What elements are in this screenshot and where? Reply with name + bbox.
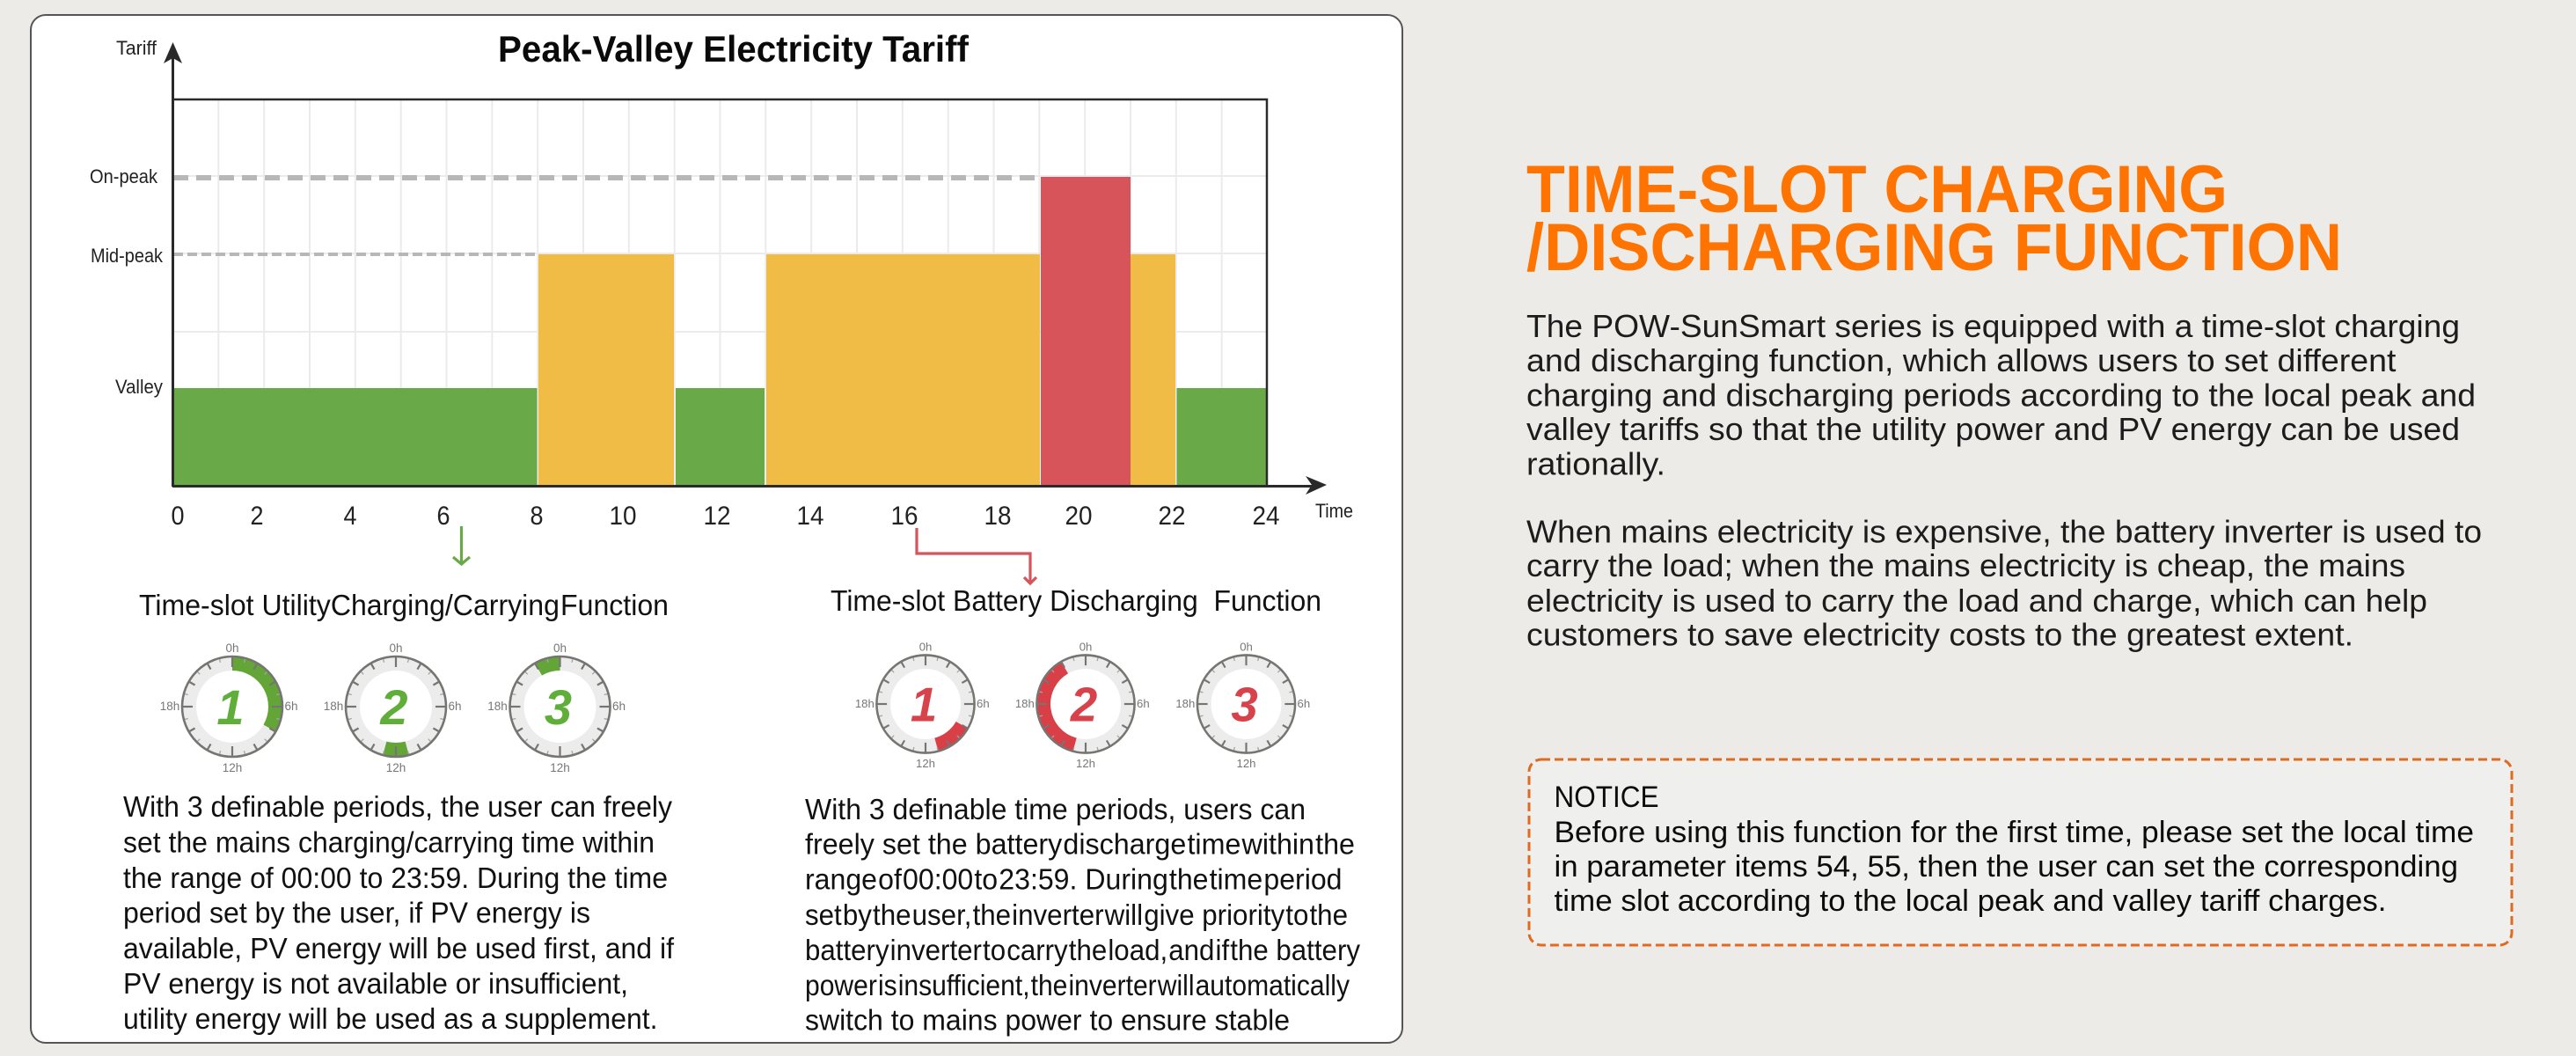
clock: utility period 3: 0h [553, 642, 567, 655]
x axis labels: 12 [704, 502, 730, 531]
valley bars [173, 388, 1267, 486]
x axis labels: 18 [984, 502, 1012, 531]
text: battery discharging description: With 3 definable time periods, users can [805, 793, 1306, 825]
clock: discharge period 3 [1175, 641, 1310, 770]
y axis labels: On-peak [90, 165, 158, 187]
text: utility charging description: period set by the user, if PV energy is [123, 896, 590, 929]
clock: discharge period 3: 12h [1237, 757, 1255, 770]
clock: discharge period 1: 6h [977, 697, 990, 710]
x axis labels: 24 [1253, 502, 1279, 531]
text: battery discharging description: set by the user, the inverter will give priority to the [805, 898, 1348, 931]
clock: utility period 3: 18h [487, 700, 508, 713]
x axis labels: 22 [1158, 502, 1186, 531]
heading: battery discharging: Time-slot Battery Discharging Function [831, 584, 1321, 617]
arrow: red, to battery discharging [917, 528, 1036, 583]
text: utility charging description [123, 790, 675, 1035]
x axis arrow [172, 476, 1327, 495]
clock: discharge period 3: 18h [1175, 697, 1195, 710]
x axis labels: 2 [250, 502, 264, 531]
clock: utility period 2: 6h [448, 700, 462, 713]
text: battery discharging description: freely set the battery discharge time within the [805, 827, 1355, 861]
x axis labels: 16 [890, 502, 918, 531]
clock: discharge period 1: 1 [911, 678, 937, 731]
text: usage paragraph: customers to save electricity costs to the greatest extent. [1526, 617, 2353, 653]
clock: utility period 1: 1 [216, 679, 245, 735]
main heading: TIME-SLOT CHARGING [1526, 152, 2228, 227]
text: intro paragraph: charging and discharging periods according to the local peak and [1526, 378, 2476, 414]
y axis arrow [164, 42, 182, 487]
panel: tariff chart and time-slot functions [31, 15, 1402, 1043]
text: utility charging description: the range of 00:00 to 23:59. During the time [123, 862, 668, 894]
clock: utility period 1: 6h [284, 700, 298, 713]
y axis labels [90, 37, 164, 398]
clock: utility period 3: 6h [612, 700, 626, 713]
mid-peak bars [538, 254, 1175, 486]
clock: discharge period 2: 18h [1015, 697, 1035, 710]
text: battery discharging description: power is insufficient, the inverter will automatically [805, 969, 1350, 1001]
clock: utility period 3: 12h [550, 761, 570, 774]
x axis labels: 0 [171, 502, 185, 531]
text: utility charging description: set the mains charging/carrying time within [123, 825, 655, 859]
clock: discharge period 1: 12h [916, 757, 935, 770]
clock: utility period 3 [487, 642, 626, 774]
clock: utility period 2 [324, 642, 462, 774]
clock: utility period 2: 2 [379, 679, 408, 735]
callout: notice [1529, 759, 2512, 945]
clock: discharge period 2: 2 [1070, 678, 1097, 731]
plot frame [172, 99, 1267, 487]
callout: notice: Before using this function for the first time, please set the local time [1554, 816, 2474, 849]
x axis labels [171, 500, 1353, 531]
chart title: Peak-Valley Electricity Tariff [498, 28, 970, 70]
clock: utility period 1: 0h [225, 642, 239, 655]
y axis labels: Valley [115, 376, 163, 398]
on-peak bar [1041, 177, 1131, 486]
text: battery discharging description: range of 00:00 to 23:59. During the time period [805, 863, 1343, 896]
text: intro paragraph: and discharging function, which allows users to set different [1526, 342, 2397, 378]
text: usage paragraph: electricity is used to carry the load and charge, which can help [1526, 583, 2427, 619]
clock: discharge period 3: 3 [1231, 678, 1258, 731]
y axis labels: Tariff [116, 37, 157, 59]
callout: notice: NOTICE [1554, 781, 1659, 814]
main heading: /DISCHARGING FUNCTION [1526, 210, 2342, 285]
text: utility charging description: PV energy is not available or insufficient, [123, 967, 628, 1000]
text: usage paragraph [1526, 514, 2482, 653]
clock: discharge period 2: 6h [1137, 697, 1150, 710]
text: intro paragraph: rationally. [1526, 445, 1665, 482]
clock: utility period 1: 12h [223, 761, 242, 774]
clock: utility period 1: 18h [160, 700, 179, 713]
text: usage paragraph: carry the load; when the mains electricity is cheap, the mains [1526, 547, 2405, 583]
heading: utility charging: Time-slot UtilityCharging/Carrying Function [139, 589, 669, 621]
clock: utility period 2: 12h [386, 761, 406, 774]
y axis labels: Mid-peak [91, 245, 164, 267]
chart: peak-valley tariff by hour [90, 37, 1353, 531]
text: utility charging description: With 3 definable periods, the user can freely [123, 790, 672, 823]
x axis labels: 4 [343, 502, 357, 531]
clock: discharge period 2 [1015, 641, 1150, 770]
x axis labels: 14 [797, 502, 823, 531]
text: usage paragraph: When mains electricity is expensive, the battery inverter is used to [1526, 514, 2482, 550]
x axis labels: Time [1315, 500, 1353, 522]
clock: utility period 3: 3 [545, 679, 572, 735]
x axis labels: 8 [530, 502, 544, 531]
x axis labels: 10 [609, 502, 637, 531]
clock: utility period 2: 18h [324, 700, 343, 713]
clock: utility period 1 [160, 642, 298, 774]
clock: discharge period 1 [855, 641, 990, 770]
text: utility charging description: available, PV energy will be used first, and if [123, 932, 675, 964]
x axis labels: 20 [1065, 502, 1093, 531]
text: battery discharging description: battery inverter to carry the load, and if the battery [805, 934, 1360, 966]
arrow: green, to utility charging [453, 526, 470, 564]
on-peak dashed guide [173, 175, 1039, 180]
clock: discharge period 2: 12h [1076, 757, 1095, 770]
clock: discharge period 1: 18h [855, 697, 875, 710]
x axis labels: 6 [436, 502, 450, 531]
main heading [1526, 152, 2342, 285]
clock: discharge period 2: 0h [1079, 641, 1092, 654]
callout: notice: time slot according to the local peak and valley tariff charges. [1554, 884, 2386, 918]
text: intro paragraph [1526, 308, 2476, 482]
text: battery discharging description: switch to mains power to ensure stable [805, 1004, 1290, 1037]
text: battery discharging description [805, 793, 1360, 1037]
callout: notice: in parameter items 54, 55, then the user can set the corresponding [1554, 850, 2458, 884]
mid-peak dashed guide [173, 253, 537, 256]
text: intro paragraph: The POW-SunSmart series is equipped with a time-slot charging [1526, 308, 2460, 344]
text: intro paragraph: valley tariffs so that the utility power and PV energy can be used [1526, 411, 2460, 447]
text: utility charging description: utility energy will be used as a supplement. [123, 1002, 658, 1035]
clock: discharge period 1: 0h [919, 641, 932, 654]
clock: utility period 2: 0h [389, 642, 403, 655]
clock: discharge period 3: 6h [1298, 697, 1310, 710]
clock: discharge period 3: 0h [1240, 641, 1253, 654]
